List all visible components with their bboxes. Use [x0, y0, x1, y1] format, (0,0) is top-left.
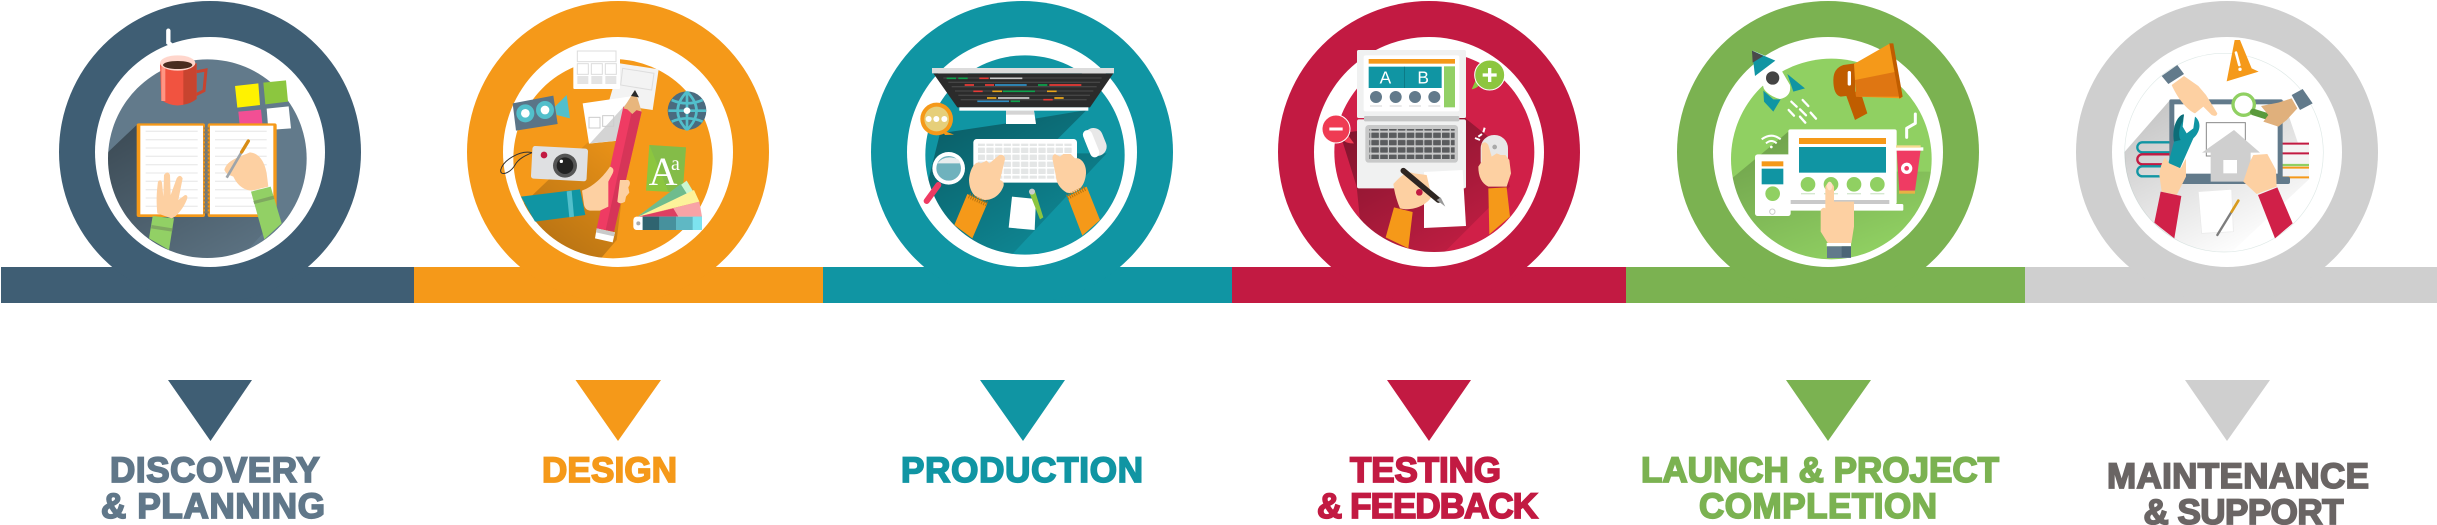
- illustration: rocket, megaphone and responsive devices: [1717, 43, 1933, 263]
- illustration: pencil, wireframes, cameras, type and swatches: [501, 47, 713, 263]
- step 1 ring: discovery and planning: [59, 1, 361, 267]
- illustration: monitor, keyboard and hands: [920, 55, 1125, 257]
- illustration: laptop repair, wrench, house and warning cone: [2123, 40, 2323, 257]
- arrow 5: [1786, 380, 1871, 441]
- label: launch and project completion: COMPLETION: [1699, 487, 1937, 525]
- type sample: A: [649, 149, 678, 194]
- step 2 ring: design: [467, 1, 769, 267]
- label: testing and feedback: & FEEDBACK: [1317, 487, 1538, 525]
- label: discovery and planning: DISCOVERY: [110, 451, 319, 490]
- arrow 1: [168, 380, 252, 441]
- label: discovery and planning: & PLANNING: [101, 487, 325, 525]
- illustration: A/B test laptop, notepad and mouse: B: [1417, 67, 1429, 87]
- arrow 3: [980, 380, 1065, 441]
- illustration: A/B test laptop, notepad and mouse: [1322, 50, 1534, 253]
- label: launch and project completion: LAUNCH & PROJECT: [1641, 451, 1999, 490]
- timeline bar: [1, 267, 2437, 303]
- step 6 ring: maintenance and support: [2076, 1, 2378, 267]
- label: maintenance and support: MAINTENANCE: [2107, 457, 2369, 496]
- illustration: notebook, mug and sticky notes: [107, 31, 307, 260]
- illustration: pencil, wireframes, cameras, type and swatches: a: [671, 153, 680, 175]
- label: production: PRODUCTION: [901, 451, 1143, 490]
- A/B labels: A: [1380, 67, 1392, 87]
- label: design: DESIGN: [542, 451, 677, 490]
- step 4 ring: testing and feedback: [1278, 1, 1580, 267]
- label: testing and feedback: TESTING: [1350, 451, 1501, 490]
- arrow 4: [1387, 380, 1471, 441]
- step 5 ring: launch and project completion: [1677, 1, 1979, 267]
- arrow 6: [2185, 380, 2270, 441]
- arrow 2: [576, 380, 661, 441]
- step 3 ring: production: [871, 1, 1173, 267]
